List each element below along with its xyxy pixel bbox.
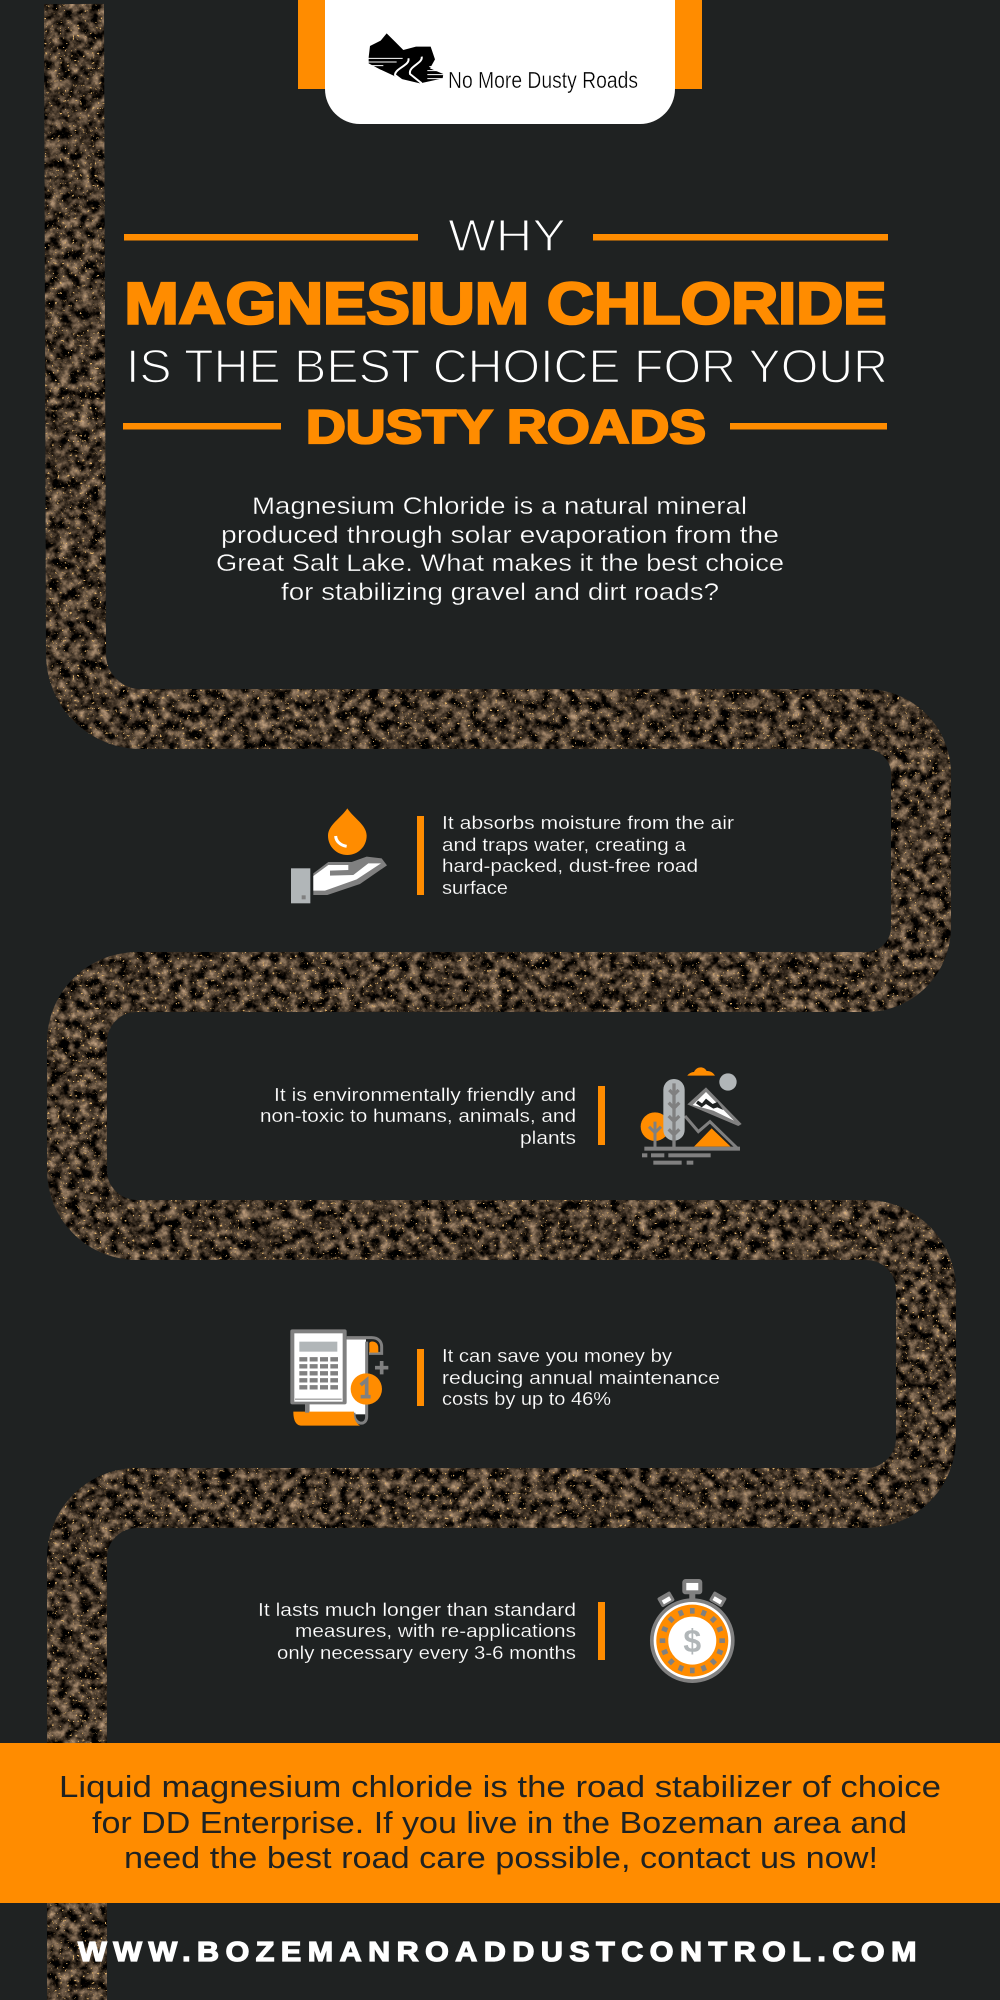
title: is the best choice: IS THE BEST CHOICE FOR YOUR xyxy=(126,340,888,392)
website url: WWW.BOZEMANROADDUSTCONTROL.COM xyxy=(78,1936,923,1967)
title: magnesium chloride: MAGNESIUM CHLORIDE xyxy=(124,272,886,336)
call to action text: Liquid magnesium chloride is the road stabilizer of choice xyxy=(59,1769,941,1804)
text: costs by up to 46% xyxy=(442,1388,611,1409)
text: reducing annual maintenance xyxy=(442,1367,720,1388)
text xyxy=(260,1084,576,1148)
accent bar xyxy=(598,1086,605,1145)
call to action band xyxy=(0,1743,1000,1903)
text: non-toxic to humans, animals, and xyxy=(260,1105,576,1126)
text: surface xyxy=(442,877,508,898)
title: dusty roads: DUSTY ROADS xyxy=(306,401,706,454)
item 3: savings xyxy=(290,1329,720,1426)
title rule left xyxy=(124,234,418,240)
text: and traps water, creating a xyxy=(442,834,687,855)
accent bar xyxy=(598,1602,605,1660)
title word: why: WHY xyxy=(448,210,566,261)
text: It is environmentally friendly and xyxy=(274,1084,576,1105)
icon: calculator and receipt xyxy=(290,1329,388,1426)
logo mark: mountains and road xyxy=(367,33,445,83)
title block xyxy=(123,210,888,454)
text: hard-packed, dust-free road xyxy=(442,855,698,876)
item 4: long lasting xyxy=(258,1579,735,1683)
text xyxy=(442,812,734,898)
title rule lower right xyxy=(730,423,887,430)
call to action text xyxy=(59,1769,941,1875)
title rule lower left xyxy=(123,423,281,430)
text: It lasts much longer than standard xyxy=(258,1599,576,1620)
text: only necessary every 3-6 months xyxy=(277,1642,576,1663)
icon: drop over hand xyxy=(291,808,387,903)
accent bar xyxy=(417,1349,424,1406)
intro paragraph: produced through solar evaporation from the xyxy=(221,522,779,549)
intro paragraph xyxy=(216,493,784,606)
text: It can save you money by xyxy=(442,1345,673,1366)
icon: stopwatch with dollar: $ xyxy=(683,1623,701,1659)
accent bar xyxy=(417,816,424,895)
title rule right xyxy=(593,234,888,240)
intro paragraph: Magnesium Chloride is a natural mineral xyxy=(252,493,747,520)
text: plants xyxy=(520,1127,576,1148)
icon: trees and mountains xyxy=(641,1067,742,1165)
text: It absorbs moisture from the air xyxy=(442,812,734,833)
text xyxy=(258,1599,576,1663)
item 1: moisture xyxy=(291,808,734,903)
call to action text: for DD Enterprise. If you live in the Bozeman area and xyxy=(92,1805,907,1840)
item 2: environment xyxy=(260,1067,742,1165)
text: measures, with re-applications xyxy=(295,1620,576,1641)
logo wordmark: No More Dusty Roads xyxy=(448,67,638,93)
intro paragraph: Great Salt Lake. What makes it the best choice xyxy=(216,550,784,577)
text xyxy=(442,1345,720,1409)
logo tab xyxy=(298,0,702,124)
call to action text: need the best road care possible, contact us now! xyxy=(124,1840,878,1875)
intro paragraph: for stabilizing gravel and dirt roads? xyxy=(281,579,719,606)
icon: stopwatch with dollar xyxy=(650,1579,735,1683)
